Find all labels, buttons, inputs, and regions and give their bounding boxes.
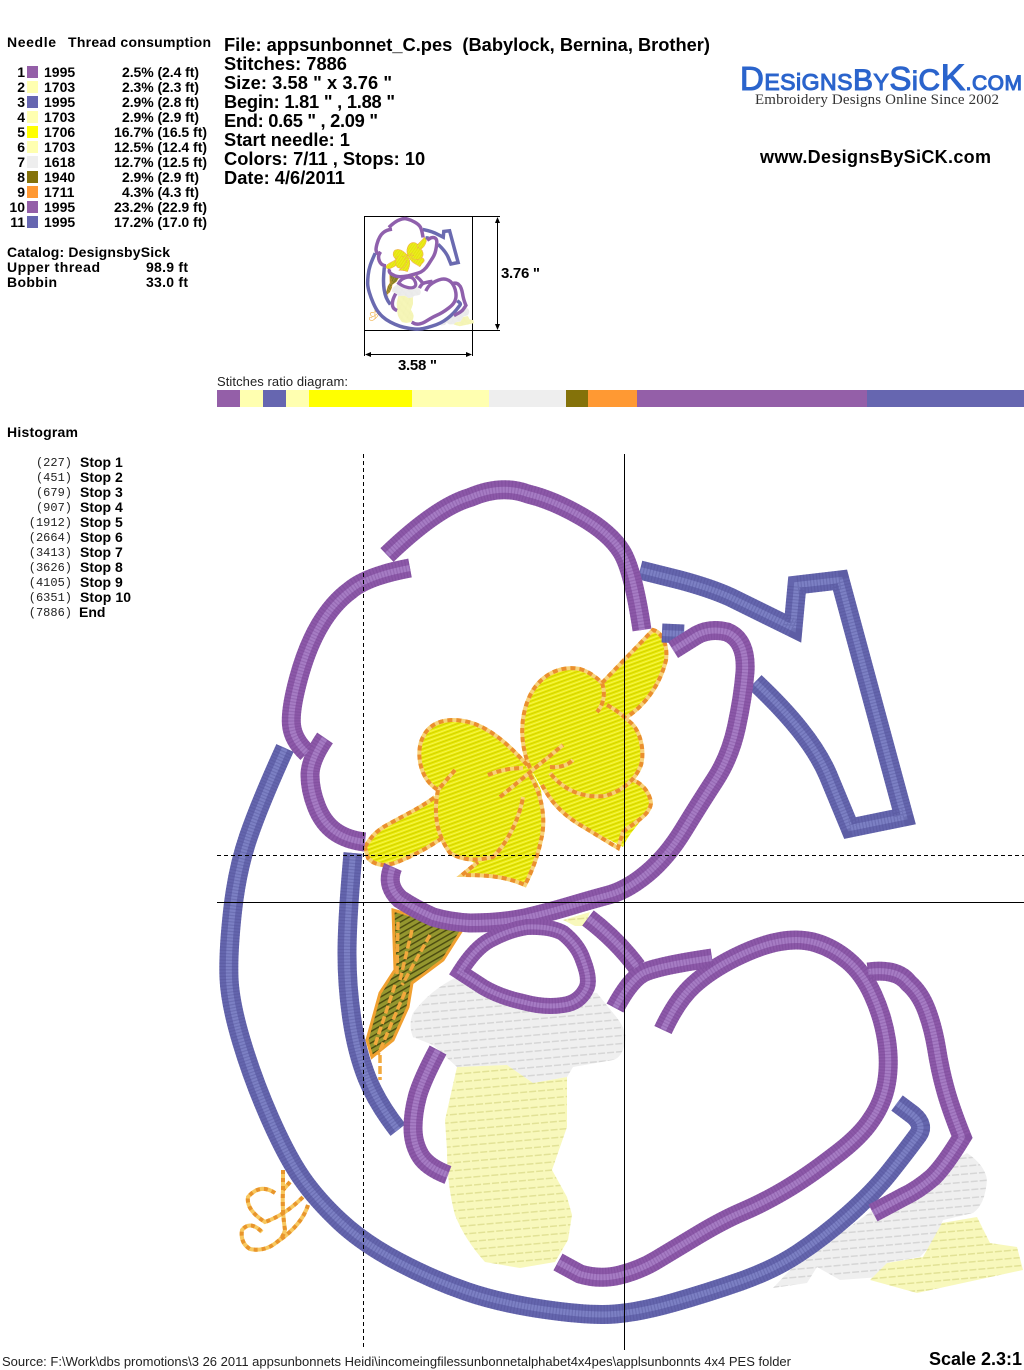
- thread table rows with colour swatches: 1995: [44, 64, 75, 80]
- thread table rows with colour swatches: 1995: [44, 199, 75, 215]
- thread table rows with colour swatches: 5: [17, 124, 25, 140]
- file information block: Stitches: 7886: [224, 53, 347, 74]
- cream leg and foot fills: [445, 912, 1023, 1293]
- file information block: File: appsunbonnet_C.pes (Babylock, Bernina, Brother): [224, 34, 710, 55]
- thread table rows with colour swatches: 1703: [44, 109, 75, 125]
- source footer: Source: F:\Work\dbs promotions\3 26 2011 appsunbonnets Heidi\incomeingfilessunbonnetalphabet4x4pes\applsunbonnts 4x4 PES folder: [2, 1354, 792, 1369]
- thread table rows with colour swatches: 1995: [44, 94, 75, 110]
- thread table rows with colour swatches: 17.2% (17.0 ft): [114, 214, 207, 230]
- thread table rows with colour swatches: 4.3% (4.3 ft): [122, 184, 199, 200]
- histogram stop list: Stop 6: [80, 529, 123, 545]
- file information block: Start needle: 1: [224, 129, 350, 150]
- catalog and thread totals: 98.9 ft: [146, 259, 188, 275]
- thread table rows with colour swatches: 9: [17, 184, 25, 200]
- file information block: [224, 34, 710, 188]
- thread table rows with colour swatches: 12.7% (12.5 ft): [114, 154, 207, 170]
- histogram stop list: (6351): [29, 591, 72, 605]
- histogram stop list: (2664): [29, 531, 72, 545]
- thread table rows with colour swatches: 4: [17, 109, 25, 125]
- histogram stop list: (227): [36, 456, 72, 470]
- thread table rows with colour swatches: [9, 64, 207, 230]
- histogram stop list: Stop 7: [80, 544, 123, 560]
- blue outline strands: [229, 570, 921, 1314]
- histogram stop list: End: [79, 604, 105, 620]
- thread table rows with colour swatches: 11: [10, 214, 25, 230]
- thread table rows with colour swatches: 2.5% (2.4 ft): [122, 64, 199, 80]
- thread table rows with colour swatches: 12.5% (12.4 ft): [114, 139, 207, 155]
- logo: DesignsBySiCK.com: Embroidery Designs Online Since 2002: [755, 92, 999, 108]
- thread table rows with colour swatches: 2.3% (2.3 ft): [122, 79, 199, 95]
- logo: DesignsBySiCK.com: DESiGNSBYSiCK.COM: [740, 57, 1022, 98]
- stitches ratio label: Stitches ratio diagram:: [217, 374, 348, 389]
- catalog and thread totals: 33.0 ft: [146, 274, 188, 290]
- embroidery design: [229, 490, 1023, 1314]
- file information block: Begin: 1.81 " , 1.88 ": [224, 91, 395, 112]
- histogram stop list: Stop 3: [80, 484, 123, 500]
- histogram stop list: (4105): [29, 576, 72, 590]
- histogram stop list: Stop 1: [80, 454, 123, 470]
- white skirt and shoe fills: [410, 977, 987, 1288]
- catalog and thread totals: Catalog: DesignsbySick: [7, 244, 170, 260]
- file information block: Colors: 7/11 , Stops: 10: [224, 148, 425, 169]
- histogram stop list: (451): [36, 471, 72, 485]
- design thumbnail with dimensions: [364, 216, 540, 374]
- orange squiggle: [242, 1170, 308, 1250]
- yellow bow: [365, 630, 666, 885]
- thread table rows with colour swatches: 2.9% (2.8 ft): [122, 94, 199, 110]
- thread table rows with colour swatches: 6: [17, 139, 25, 155]
- thread table rows with colour swatches: 8: [17, 169, 25, 185]
- design thumbnail with dimensions: 3.76 ": [501, 265, 540, 282]
- website URL: www.DesignsBySiCK.com: [759, 147, 991, 167]
- thread table header: Thread consumption: [68, 34, 211, 50]
- thread table rows with colour swatches: 1706: [44, 124, 75, 140]
- histogram stop list: Stop 5: [80, 514, 123, 530]
- thread table rows with colour swatches: 2: [17, 79, 25, 95]
- histogram stop list: (1912): [29, 516, 72, 530]
- histogram stop list: (679): [36, 486, 72, 500]
- thread table rows with colour swatches: 2.9% (2.9 ft): [122, 109, 199, 125]
- file information block: Size: 3.58 " x 3.76 ": [224, 72, 392, 93]
- file information block: End: 0.65 " , 2.09 ": [224, 110, 378, 131]
- purple outline strands: [291, 490, 962, 1277]
- thread table rows with colour swatches: 1703: [44, 79, 75, 95]
- histogram stop list: Stop 9: [80, 574, 123, 590]
- scale label: Scale 2.3:1: [929, 1349, 1022, 1369]
- thread table rows with colour swatches: 1995: [44, 214, 75, 230]
- thread table rows with colour swatches: 1: [17, 64, 25, 80]
- thread table rows with colour swatches: 1703: [44, 139, 75, 155]
- histogram stop list: (7886): [29, 606, 72, 620]
- design thumbnail with dimensions: 3.58 ": [398, 357, 437, 374]
- histogram stop list: (3413): [29, 546, 72, 560]
- thread table rows with colour swatches: 16.7% (16.5 ft): [114, 124, 207, 140]
- histogram stop list: (907): [36, 501, 72, 515]
- olive braid: [367, 910, 462, 1080]
- histogram stop list: Stop 4: [80, 499, 123, 515]
- catalog and thread totals: Bobbin: [7, 274, 57, 290]
- catalog and thread totals: Upper thread: [7, 259, 100, 275]
- thread table rows with colour swatches: 10: [9, 199, 25, 215]
- histogram stop list: Stop 10: [80, 589, 131, 605]
- thread table rows with colour swatches: 3: [17, 94, 25, 110]
- thread table rows with colour swatches: 23.2% (22.9 ft): [114, 199, 207, 215]
- catalog and thread totals: [7, 244, 188, 290]
- histogram stop list: Stop 2: [80, 469, 123, 485]
- histogram stop list: Stop 8: [80, 559, 123, 575]
- stitches ratio bar: [217, 390, 1024, 407]
- histogram stop list: (3626): [29, 561, 72, 575]
- centre crosshair lines: [217, 454, 1024, 1350]
- file information block: Date: 4/6/2011: [224, 167, 345, 188]
- thread table rows with colour swatches: 1940: [44, 169, 75, 185]
- thread table rows with colour swatches: 7: [17, 154, 25, 170]
- thread table rows with colour swatches: 1618: [44, 154, 75, 170]
- histogram stop list: [29, 454, 131, 620]
- thread table rows with colour swatches: 1711: [44, 184, 75, 200]
- thread table rows with colour swatches: 2.9% (2.9 ft): [122, 169, 199, 185]
- thread table header: Needle: [7, 34, 56, 50]
- histogram heading: Histogram: [7, 424, 78, 440]
